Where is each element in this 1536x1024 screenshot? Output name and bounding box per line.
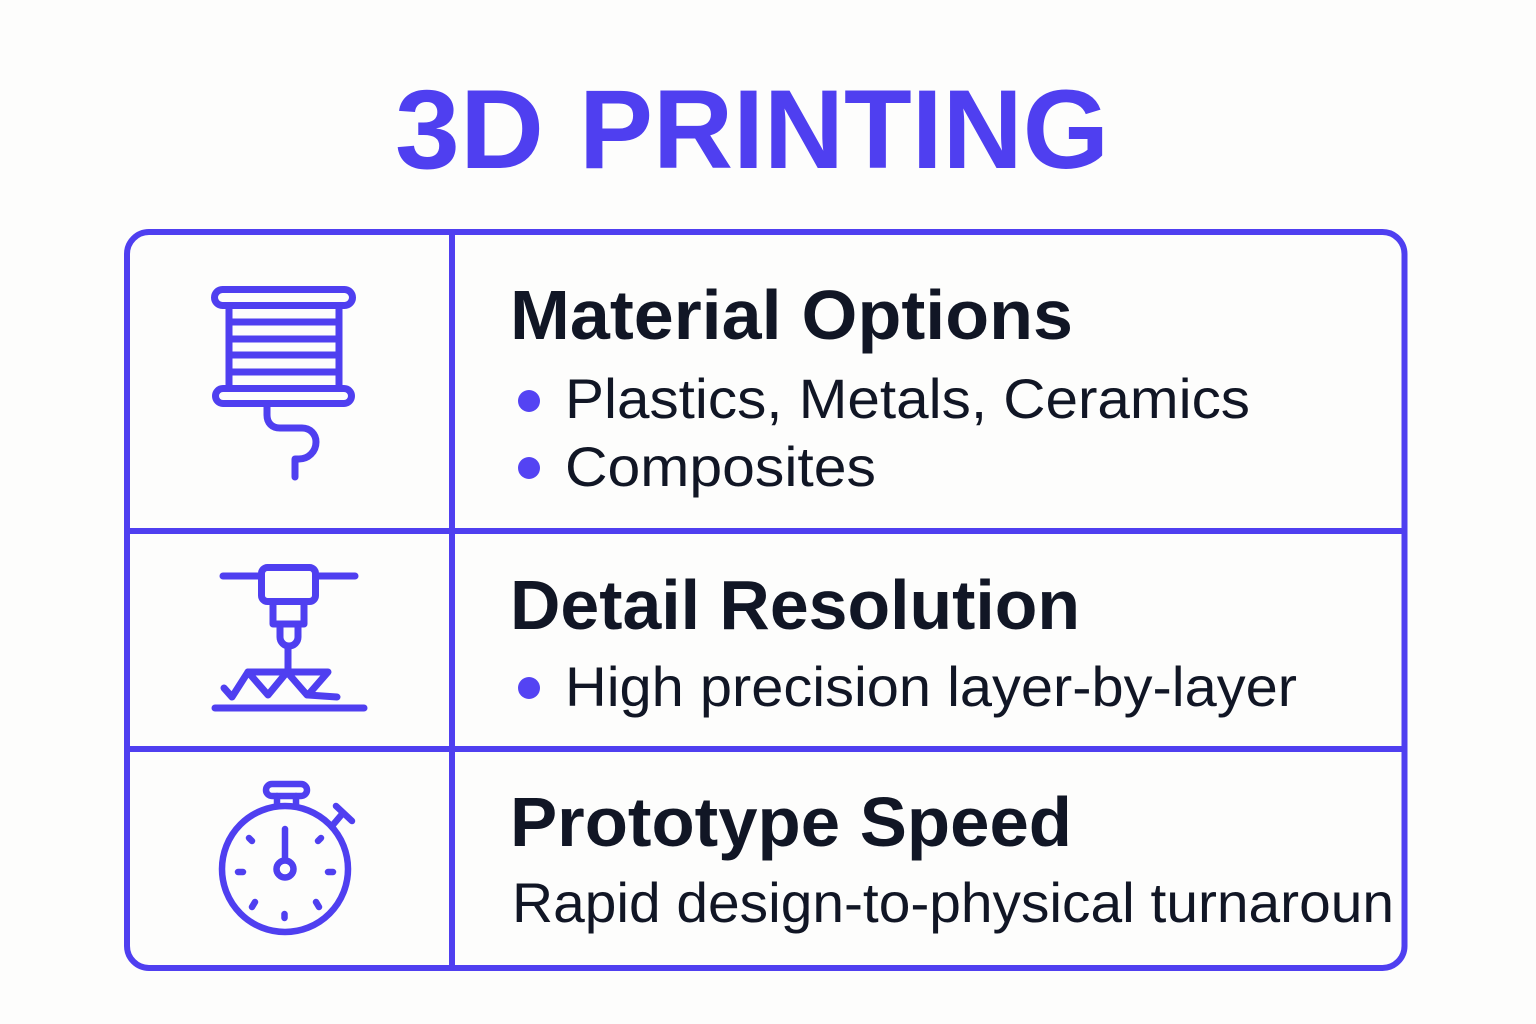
heading: prototype speed: Prototype Speed	[510, 783, 1072, 861]
icon: filament spool	[214, 290, 352, 477]
icon: stopwatch	[222, 784, 352, 932]
panel: material options	[510, 276, 1250, 498]
panel: prototype speed	[510, 783, 1394, 934]
bullet: composites: Composites	[565, 435, 876, 498]
panel: detail resolution	[510, 566, 1297, 718]
heading: material options: Material Options	[510, 276, 1073, 354]
title: PRINTING	[579, 67, 1109, 192]
body text: rapid turnaround: Rapid design-to-physical turnaroun	[512, 871, 1394, 934]
bullet: plastics, metals, ceramics: Plastics, Metals, Ceramics	[565, 367, 1250, 430]
title: 3D	[395, 67, 544, 192]
bullet: high precision: High precision layer-by-layer	[565, 655, 1297, 718]
table frame	[127, 232, 1404, 968]
heading: detail resolution: Detail Resolution	[510, 566, 1080, 644]
icon: printer nozzle	[215, 568, 364, 708]
